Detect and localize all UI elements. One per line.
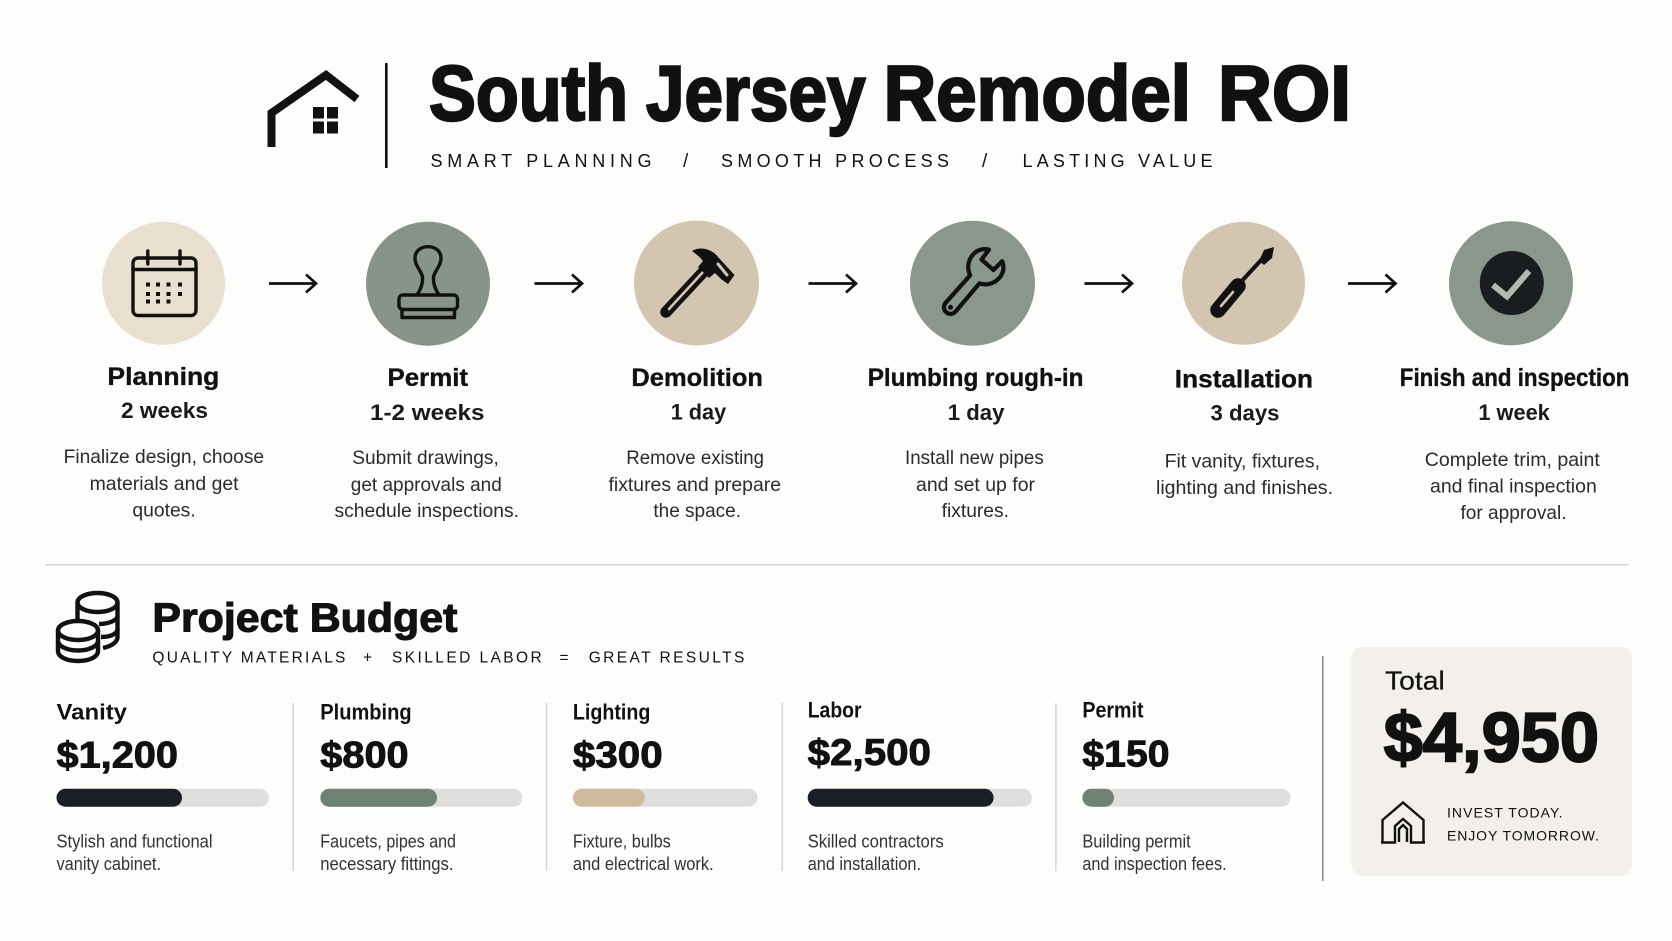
step description: and final inspection xyxy=(1430,476,1597,498)
budget item: plumbing: $800 xyxy=(320,733,409,775)
budget item: labor: $2,500 xyxy=(808,731,931,773)
title: Remodel xyxy=(884,49,1191,137)
icon: small house xyxy=(1381,802,1425,843)
step description xyxy=(1425,449,1600,524)
heading tagline: SKILLED LABOR xyxy=(392,649,542,666)
progress bar xyxy=(56,789,269,807)
step title: Installation xyxy=(1175,366,1313,394)
budget item: lighting: $300 xyxy=(573,733,663,775)
total card xyxy=(1352,647,1632,876)
icon: check xyxy=(1480,251,1544,315)
step description xyxy=(334,447,519,522)
budget item: lighting: Fixture, bulbs xyxy=(573,832,671,852)
total label: Total xyxy=(1385,665,1445,695)
title: ROI xyxy=(1218,49,1351,137)
total tagline xyxy=(1447,805,1599,843)
step duration: 2 weeks xyxy=(121,398,208,423)
arrow xyxy=(269,274,316,292)
step description: Complete trim, paint xyxy=(1425,449,1600,471)
step title: Plumbing rough-in xyxy=(868,364,1084,392)
step description: fixtures. xyxy=(942,500,1009,522)
subtitle: SMART PLANNING xyxy=(430,151,652,171)
budget item: labor xyxy=(808,698,1032,874)
step: planning xyxy=(64,222,264,522)
step description xyxy=(905,447,1044,522)
step description: the space. xyxy=(653,500,741,522)
total tagline: INVEST TODAY. xyxy=(1447,805,1562,821)
step duration: 1 week xyxy=(1478,400,1551,425)
header xyxy=(272,49,1351,172)
progress bar xyxy=(320,789,522,807)
step: installation xyxy=(1156,222,1333,499)
arrow xyxy=(534,274,582,292)
step description: lighting and finishes. xyxy=(1156,477,1333,499)
arrow xyxy=(1084,274,1132,292)
budget item: permit xyxy=(1082,698,1290,874)
budget item: vanity: $1,200 xyxy=(56,733,178,775)
budget item: plumbing: necessary fittings. xyxy=(320,854,454,874)
step title: Finish and inspection xyxy=(1400,364,1629,392)
step duration: 1 day xyxy=(948,400,1005,425)
step description: Finalize design, choose xyxy=(64,446,264,468)
subtitle: / xyxy=(982,151,988,172)
subtitle xyxy=(430,151,1212,172)
step duration: 1-2 weeks xyxy=(370,400,484,425)
icon: hammer xyxy=(666,249,734,312)
heading tagline xyxy=(152,649,744,666)
icon: coins xyxy=(58,593,118,661)
budget item: vanity: Stylish and functional xyxy=(56,832,212,852)
step description: Install new pipes xyxy=(905,447,1044,469)
budget item: vanity: vanity cabinet. xyxy=(56,854,161,874)
budget item: vanity xyxy=(56,700,269,874)
icon: calendar xyxy=(133,251,196,316)
budget item: labor: and installation. xyxy=(808,854,921,874)
budget heading xyxy=(58,593,744,666)
progress bar xyxy=(1082,789,1290,807)
step description: fixtures and prepare xyxy=(608,474,781,496)
step description: Remove existing xyxy=(626,447,764,469)
title xyxy=(429,49,1351,137)
step description: Submit drawings, xyxy=(352,447,499,469)
total amount: $4,950 xyxy=(1384,699,1599,777)
icon: wrench xyxy=(933,244,1009,324)
heading tagline: QUALITY MATERIALS xyxy=(152,649,345,666)
title: Jersey xyxy=(646,49,866,137)
budget item: permit: $150 xyxy=(1082,733,1170,775)
step description: schedule inspections. xyxy=(334,500,519,522)
step description xyxy=(608,447,781,522)
progress bar xyxy=(808,789,1032,807)
step title: Demolition xyxy=(631,364,763,392)
icon: house logo xyxy=(272,75,357,147)
progress bar xyxy=(573,789,758,807)
budget item: plumbing xyxy=(320,700,522,874)
budget item: lighting xyxy=(573,700,758,874)
step description xyxy=(1156,451,1333,499)
arrow xyxy=(808,274,856,292)
step: finish and inspection xyxy=(1400,221,1629,524)
budget item: vanity: Vanity xyxy=(56,700,128,724)
budget item: lighting: Lighting xyxy=(573,700,650,724)
step description xyxy=(64,446,264,522)
icon: stamp xyxy=(399,247,458,318)
step title: Planning xyxy=(107,363,219,391)
step title: Permit xyxy=(388,364,469,392)
icon: screwdriver xyxy=(1218,247,1274,310)
title: South xyxy=(429,49,628,137)
step description: for approval. xyxy=(1460,502,1566,524)
subtitle: / xyxy=(683,151,689,172)
heading tagline: = xyxy=(560,649,569,666)
budget item: lighting: and electrical work. xyxy=(573,854,714,874)
budget item: labor: Skilled contractors xyxy=(808,832,944,852)
heading tagline: GREAT RESULTS xyxy=(589,649,744,666)
step description: materials and get xyxy=(90,473,239,495)
step duration: 3 days xyxy=(1210,401,1280,426)
subtitle: LASTING VALUE xyxy=(1022,151,1212,171)
heading tagline: + xyxy=(363,649,372,666)
step description: Fit vanity, fixtures, xyxy=(1165,451,1320,473)
budget item: permit: Permit xyxy=(1082,698,1144,723)
budget item: plumbing: Faucets, pipes and xyxy=(320,832,456,852)
step: demolition xyxy=(608,220,781,522)
step description: quotes. xyxy=(132,500,196,522)
subtitle: SMOOTH PROCESS xyxy=(721,151,949,171)
step description: and set up for xyxy=(916,474,1036,496)
budget item: permit: and inspection fees. xyxy=(1082,854,1227,874)
step: plumbing rough-in xyxy=(868,221,1084,522)
budget item: labor: Labor xyxy=(808,698,862,723)
arrow xyxy=(1348,274,1396,292)
heading text: Project Budget xyxy=(152,594,458,640)
budget item: permit: Building permit xyxy=(1082,832,1191,852)
step duration: 1 day xyxy=(671,400,727,424)
total tagline: ENJOY TOMORROW. xyxy=(1447,827,1599,843)
step: permit xyxy=(334,222,519,522)
step description: get approvals and xyxy=(351,474,502,496)
budget item: plumbing: Plumbing xyxy=(320,700,412,724)
